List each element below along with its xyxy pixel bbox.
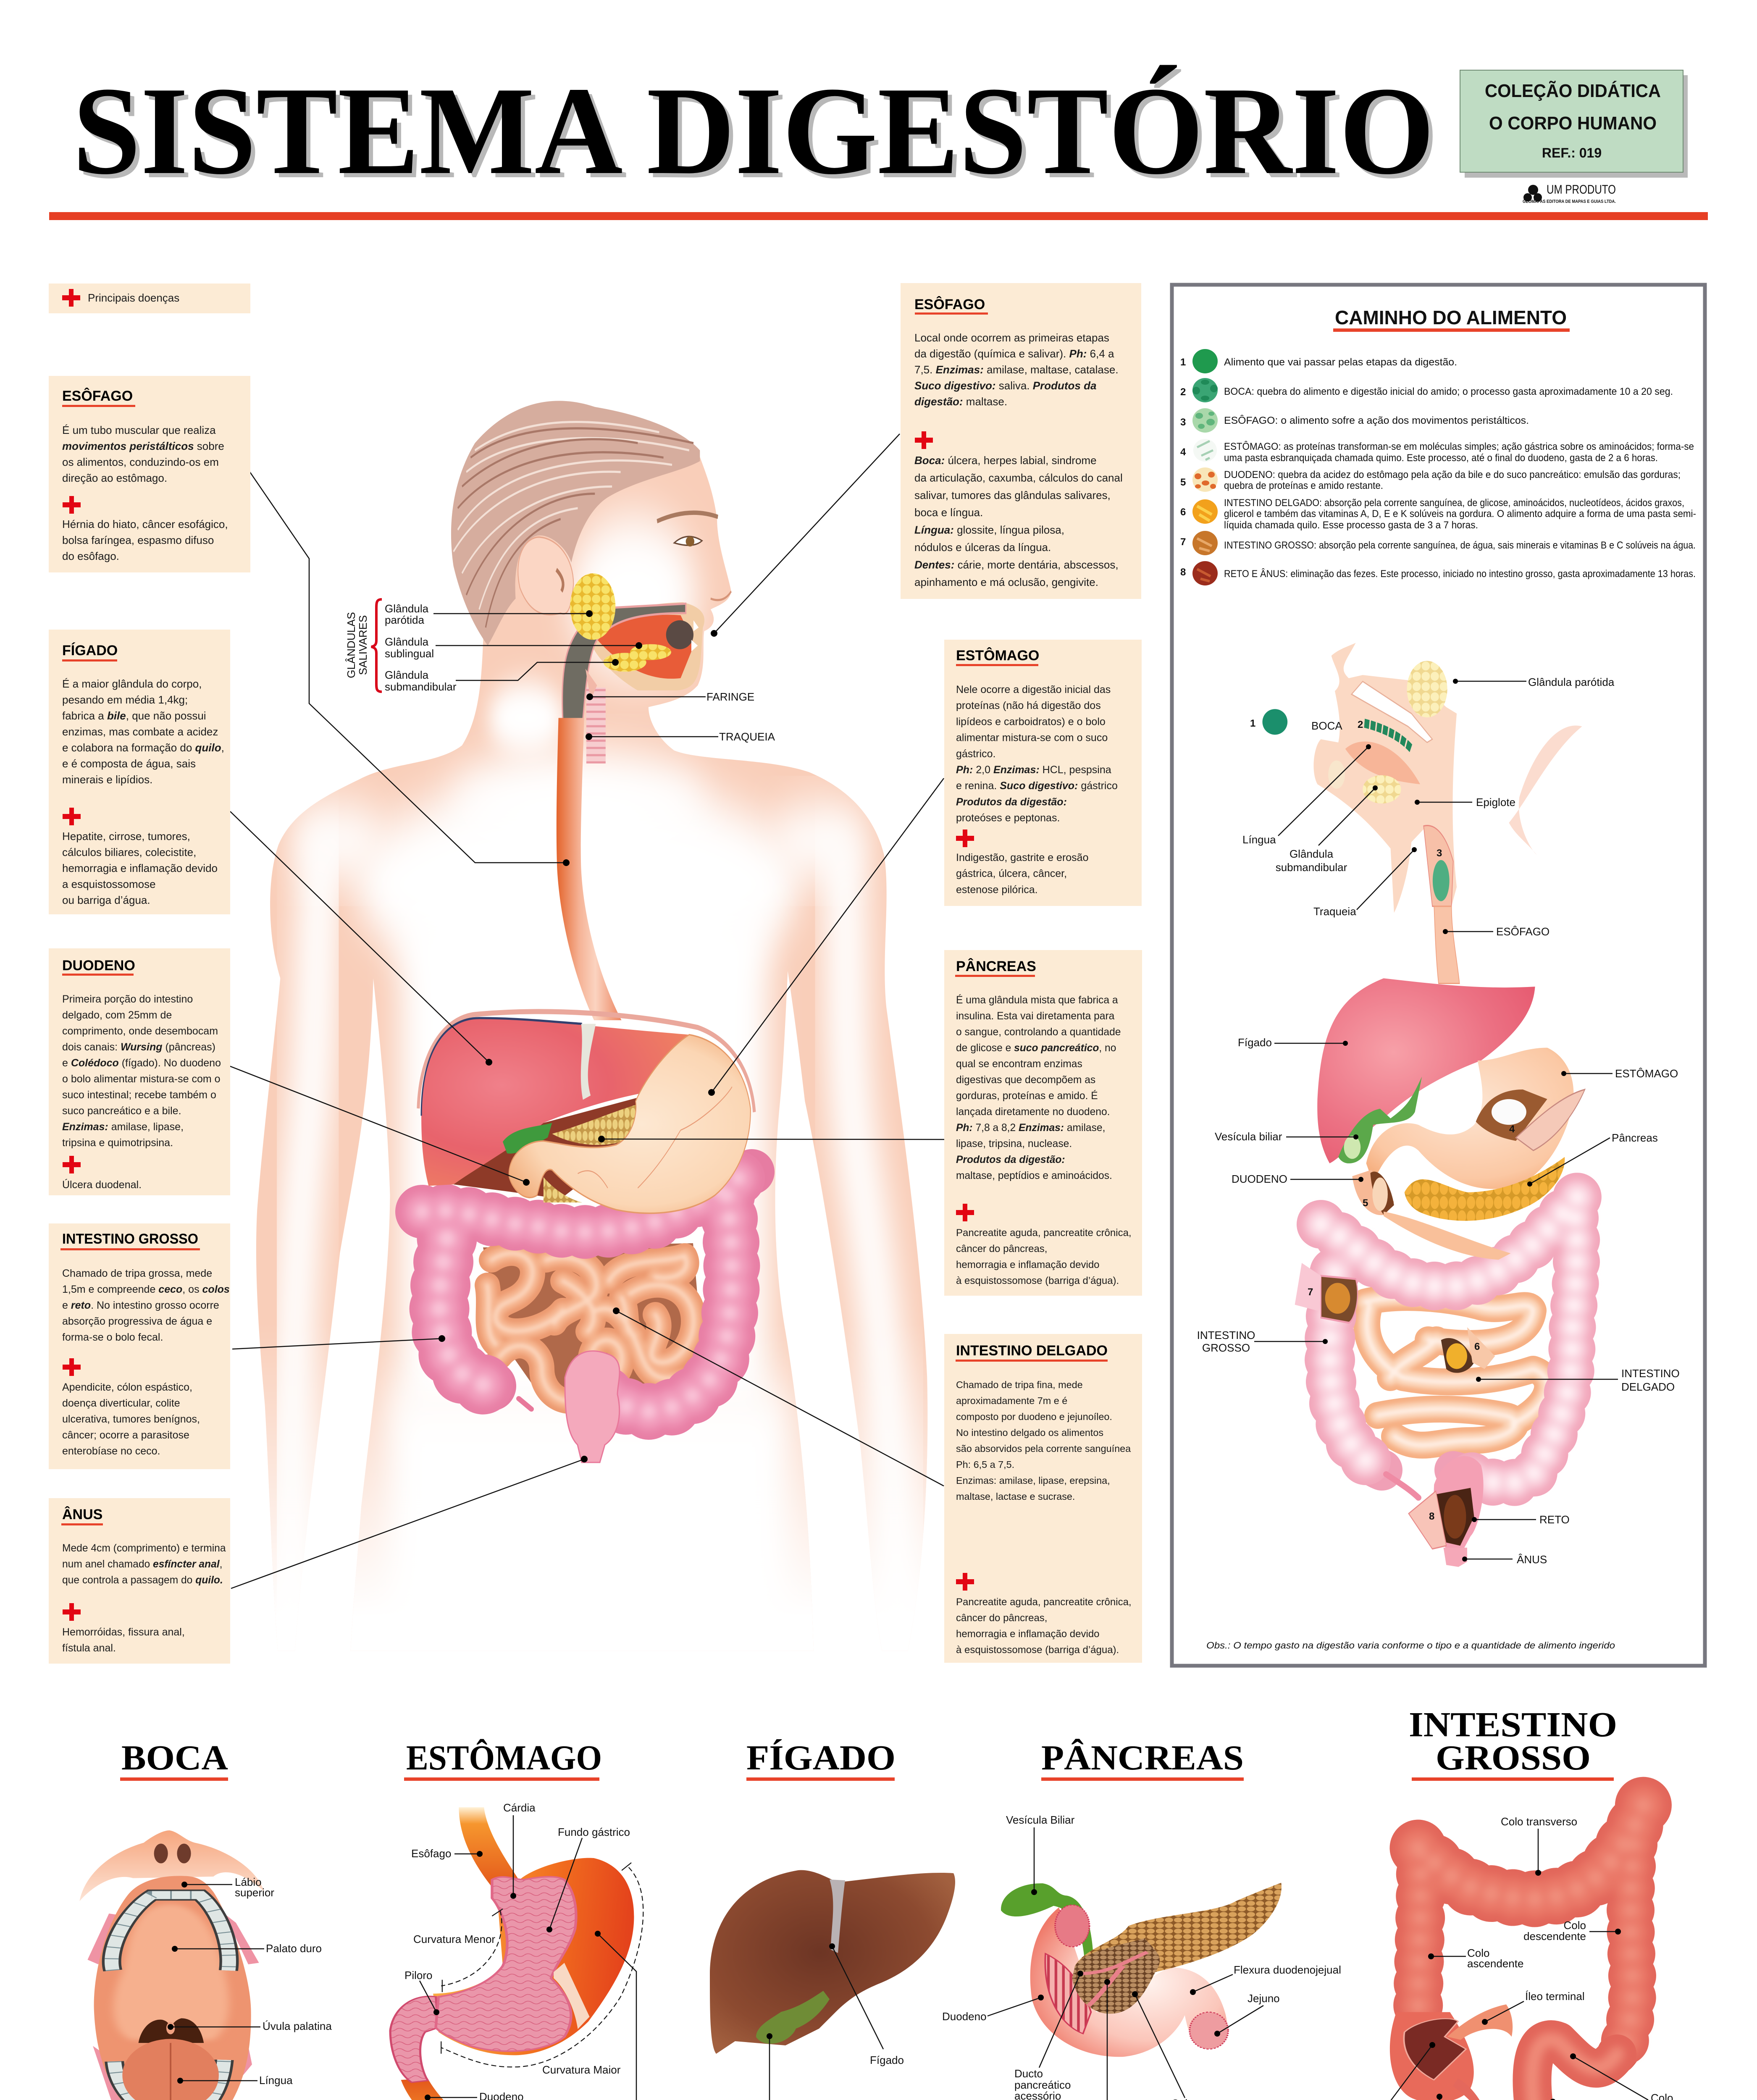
panel: intestino grosso: doença diverticular, colite bbox=[62, 1397, 180, 1409]
panel: pâncreas: digestivas que decompõem as bbox=[956, 1074, 1095, 1086]
illustration: mouth: Língua bbox=[259, 2074, 293, 2087]
large intestine bbox=[1321, 1197, 1577, 1498]
diagram labels bbox=[1197, 676, 1680, 1566]
panel: ânus: ÂNUS bbox=[62, 1507, 102, 1522]
illustration: mouth: Palato duro bbox=[266, 1942, 322, 1955]
panel: pâncreas: hemorragia e inflamação devido bbox=[956, 1259, 1100, 1270]
panel: estômago: gástrico. bbox=[956, 748, 995, 760]
panel: pâncreas: o sangue, controlando a quantidade bbox=[956, 1026, 1121, 1038]
panel: legend: Principais doenças bbox=[88, 291, 179, 304]
panel: ânus: que controla a passagem do quilo. bbox=[62, 1575, 223, 1586]
panel: esôfago right: 7,5. Enzimas: amilase, maltase, catalase. bbox=[914, 363, 1119, 376]
diagram labels: Traqueia bbox=[1313, 905, 1356, 918]
illustration: pancreas bbox=[942, 1814, 1341, 2100]
food stage list: INTESTINO DELGADO: absorção pela corrente sanguínea, de glicose, aminoácidos, nucleotídeos, ácidos graxos, bbox=[1224, 497, 1684, 509]
panel: ânus: Hemorróidas, fissura anal, bbox=[62, 1626, 185, 1638]
hair bbox=[451, 401, 700, 646]
panel: intestino grosso: enterobíase no ceco. bbox=[62, 1445, 160, 1457]
liver, stomach, pancreas bbox=[1317, 978, 1585, 1260]
salivary gland labels: Glândula bbox=[385, 669, 429, 681]
diagram labels: 2 bbox=[1358, 719, 1363, 730]
panel: esôfago left: do esôfago. bbox=[62, 550, 119, 562]
salivary gland labels bbox=[345, 599, 642, 693]
food stage list: 4 bbox=[1180, 446, 1186, 458]
diagram labels: 7 bbox=[1308, 1286, 1313, 1298]
diagram labels: INTESTINO bbox=[1197, 1329, 1255, 1341]
panel: fígado: enzimas, mas combate a acidez bbox=[62, 725, 218, 738]
diagram labels: 4 bbox=[1509, 1124, 1515, 1135]
heading: intestino grosso bbox=[1409, 1705, 1617, 1781]
panel: fígado: cálculos biliares, colecistite, bbox=[62, 846, 196, 858]
panel: esôfago left bbox=[49, 376, 250, 572]
food stage list: quebra de proteínas e amido restante. bbox=[1224, 480, 1383, 491]
panel: estômago: ESTÔMAGO bbox=[956, 647, 1039, 664]
panel: duodeno: Enzimas: amilase, lipase, bbox=[62, 1121, 184, 1133]
panel: intestino grosso: ulcerativa, tumores benígnos, bbox=[62, 1413, 200, 1425]
note: Obs.: O tempo gasto na digestão varia conforme o tipo e a quantidade de alimento ingerido bbox=[1206, 1640, 1615, 1651]
diagram labels: 8 bbox=[1429, 1511, 1434, 1522]
food stage list bbox=[1180, 349, 1696, 585]
panel: intestino grosso: e reto. No intestino grosso ocorre bbox=[62, 1299, 219, 1311]
panel: duodeno: suco intestinal; recebe também o bbox=[62, 1089, 216, 1101]
food stage list: ESTÔMAGO: as proteínas transforman-se em moléculas simples; ação gástrica sobre os aminoácidos; forma-se bbox=[1224, 441, 1694, 452]
heading: intestino grosso: INTESTINO bbox=[1409, 1705, 1617, 1744]
panel: estômago: alimentar mistura-se com o suco bbox=[956, 732, 1108, 744]
panel: intestino grosso: câncer; ocorre a parasitose bbox=[62, 1429, 189, 1441]
panel: esôfago right: apinhamento e má oclusão, gengivite. bbox=[914, 576, 1098, 588]
panel: esôfago left: direção ao estômago. bbox=[62, 472, 167, 484]
panel: esôfago left: os alimentos, conduzindo-os em bbox=[62, 456, 219, 468]
panel: intestino grosso: Chamado de tripa grossa, mede bbox=[62, 1268, 212, 1279]
illustration: liver bbox=[710, 1870, 955, 2100]
panel: esôfago right: nódulos e úlceras da língua. bbox=[914, 541, 1051, 554]
food stage list: ESÔFAGO: o alimento sofre a ação dos movimentos peristálticos. bbox=[1224, 415, 1529, 426]
liver, stomach and pancreas bbox=[418, 1012, 754, 1213]
panel: duodeno: e Colédoco (fígado). No duodeno bbox=[62, 1057, 221, 1069]
panel: esôfago left: É um tubo muscular que realiza bbox=[62, 424, 216, 436]
illustration: large intestine: Colo transverso bbox=[1501, 1815, 1577, 1828]
panel: ânus bbox=[49, 1498, 230, 1664]
illustration: large intestine: ascendente bbox=[1467, 1957, 1523, 1970]
illustration: mouth: Úvula palatina bbox=[263, 2020, 332, 2032]
panel: duodeno bbox=[49, 948, 230, 1195]
salivary gland labels: parótida bbox=[385, 614, 424, 626]
diagram labels: Vesícula biliar bbox=[1215, 1130, 1282, 1143]
head section bbox=[1262, 643, 1582, 984]
diagram labels: 1 bbox=[1250, 718, 1255, 729]
diagram labels: submandibular bbox=[1276, 861, 1347, 874]
panel: fígado: e é composta de água, sais bbox=[62, 757, 196, 770]
food stage list: 7 bbox=[1180, 536, 1186, 548]
panel: pâncreas bbox=[944, 950, 1142, 1296]
panel: estômago: Ph: 2,0 Enzimas: HCL, pespsina bbox=[956, 764, 1111, 776]
top red rule bbox=[49, 212, 1708, 220]
illustration: stomach: Curvatura Menor bbox=[413, 1933, 495, 1945]
diagram labels: Pâncreas bbox=[1612, 1131, 1658, 1144]
panel: intestino grosso: Apendicite, cólon espástico, bbox=[62, 1381, 192, 1393]
panel: intestino grosso: absorção progressiva de água e bbox=[62, 1315, 212, 1327]
panel: fígado: pesando em média 1,4kg; bbox=[62, 693, 188, 706]
food stage list: BOCA: quebra do alimento e digestão inicial do amido; o processo gasta aproximadamente 10 a 20 seg. bbox=[1224, 386, 1673, 397]
diagram labels: 3 bbox=[1437, 848, 1442, 859]
panel: fígado bbox=[49, 630, 230, 914]
publisher mark: UM PRODUTO bbox=[1547, 183, 1616, 197]
panel: intestino delgado: composto por duodeno e jejunoíleo. bbox=[956, 1411, 1112, 1422]
panel: pâncreas: insulina. Esta vai diretamenta para bbox=[956, 1011, 1115, 1022]
food stage list: 2 bbox=[1180, 386, 1186, 398]
panel: pâncreas: qual se encontram enzimas bbox=[956, 1058, 1082, 1070]
food stage list: 6 bbox=[1180, 507, 1186, 518]
pharynx and trachea labels: TRAQUEIA bbox=[719, 730, 775, 743]
panel: intestino delgado: Pancreatite aguda, pancreatite crônica, bbox=[956, 1596, 1132, 1608]
panel: intestino delgado: No intestino delgado os alimentos bbox=[956, 1427, 1103, 1438]
panel: fígado: a esquistossomose bbox=[62, 878, 156, 890]
panel: pâncreas: à esquistossomose (barriga d’água). bbox=[956, 1275, 1119, 1286]
diagram labels: Glândula bbox=[1290, 848, 1334, 860]
panel: duodeno: o bolo alimentar mistura-se com o bbox=[62, 1073, 221, 1085]
illustration: stomach bbox=[390, 1801, 651, 2100]
panel: fígado: ou barriga d’água. bbox=[62, 894, 150, 906]
cut-away windows and rectum bbox=[1295, 1263, 1495, 1567]
rectum and anus bbox=[565, 1351, 620, 1462]
title: SISTEMA DIGESTÓRIO bbox=[73, 61, 1434, 200]
collection badge: COLEÇÃO DIDÁTICA bbox=[1485, 80, 1661, 101]
illustration: large intestine: Íleo terminal bbox=[1525, 1990, 1585, 2003]
panel: intestino grosso bbox=[49, 1223, 230, 1469]
panel: esôfago right: Boca: úlcera, herpes labial, sindrome bbox=[914, 454, 1097, 467]
panel: pâncreas: lipase, tripsina, nuclease. bbox=[956, 1138, 1072, 1150]
panel: fígado: FÍGADO bbox=[62, 643, 118, 659]
food stage list: 1 bbox=[1180, 357, 1186, 368]
illustration: stomach: Curvatura Maior bbox=[542, 2063, 621, 2076]
panel: esôfago right: digestão: maltase. bbox=[914, 395, 1007, 408]
diagram labels: Língua bbox=[1242, 833, 1276, 846]
pharynx and trachea labels bbox=[586, 690, 775, 743]
salivary gland labels: GLÂNDULAS bbox=[345, 612, 357, 678]
panel: pâncreas: É uma glândula mista que fabrica a bbox=[956, 995, 1118, 1006]
food stage list: Alimento que vai passar pelas etapas da digestão. bbox=[1224, 357, 1457, 368]
diagram labels: Fígado bbox=[1238, 1036, 1272, 1049]
food stage list: INTESTINO GROSSO: absorção pela corrente sanguínea, de água, sais minerais e vitaminas B e C solúveis na água. bbox=[1224, 540, 1696, 551]
panel: esôfago left: movimentos peristálticos sobre bbox=[62, 440, 224, 452]
panel: esôfago right: Suco digestivo: saliva. Produtos da bbox=[914, 379, 1096, 392]
panel: esôfago right: Língua: glossite, língua pilosa, bbox=[914, 524, 1064, 536]
panel: ânus: Mede 4cm (comprimento) e termina bbox=[62, 1543, 226, 1554]
panel: duodeno: delgado, com 25mm de bbox=[62, 1009, 172, 1021]
panel: duodeno: Úlcera duodenal. bbox=[62, 1179, 142, 1191]
small intestine bbox=[1365, 1297, 1547, 1445]
panel: pâncreas: lançada diretamente no duodeno. bbox=[956, 1106, 1110, 1118]
panel: duodeno: tripsina e quimotripsina. bbox=[62, 1137, 173, 1149]
diagram labels: Epiglote bbox=[1476, 796, 1515, 808]
panel: estômago: gástrica, úlcera, câncer, bbox=[956, 868, 1067, 879]
body silhouette bbox=[256, 457, 927, 1651]
food stage list: glicerol e também das vitaminas A, D, E e K solúveis na gordura. O alimento adquire a forma de uma pasta semi- bbox=[1224, 508, 1696, 520]
food stage list: líquida chamada quilo. Esse processo gasta de 3 a 7 horas. bbox=[1224, 520, 1478, 531]
panel: pâncreas: Pancreatite aguda, pancreatite crônica, bbox=[956, 1227, 1132, 1239]
panel: duodeno: DUODENO bbox=[62, 958, 135, 974]
panel heading: CAMINHO DO ALIMENTO bbox=[1335, 307, 1567, 328]
illustration: pancreas: Jejuno bbox=[1247, 1992, 1280, 2005]
illustration: liver: Fígado bbox=[870, 2054, 904, 2066]
panel: esôfago right: da articulação, caxumba, cálculos do canal bbox=[914, 471, 1123, 484]
panel: esôfago right: da digestão (química e salivar). Ph: 6,4 a bbox=[914, 347, 1114, 360]
panel: intestino delgado bbox=[944, 1334, 1142, 1663]
digestive path diagram bbox=[1197, 643, 1680, 1567]
panel: esôfago right: Local onde ocorrem as primeiras etapas bbox=[914, 331, 1109, 344]
panel: intestino grosso: forma-se o bolo fecal. bbox=[62, 1331, 163, 1343]
panel: esôfago right: salivar, tumores das glândulas salivares, bbox=[914, 489, 1111, 501]
panel: intestino delgado: INTESTINO DELGADO bbox=[956, 1343, 1108, 1359]
panel: estômago: Produtos da digestão: bbox=[956, 796, 1067, 808]
food stage list: 3 bbox=[1180, 417, 1186, 428]
diagram labels: ESTÔMAGO bbox=[1615, 1067, 1678, 1080]
large intestine bbox=[422, 1172, 752, 1411]
illustration: large intestine: descendente bbox=[1523, 1930, 1586, 1942]
panel: intestino delgado: são absorvidos pela corrente sanguínea bbox=[956, 1443, 1131, 1454]
panel: intestino delgado: maltase, lactase e sucrase. bbox=[956, 1491, 1075, 1502]
panel: ânus: num anel chamado esfíncter anal, bbox=[62, 1559, 222, 1570]
panel: fígado: fabrica a bile, que não possui bbox=[62, 709, 206, 722]
diagram labels: RETO bbox=[1539, 1513, 1570, 1526]
panel: esôfago right: ESÔFAGO bbox=[914, 296, 985, 312]
illustration: pancreas: Flexura duodenojejual bbox=[1234, 1964, 1341, 1976]
salivary gland labels: SALIVARES bbox=[357, 615, 369, 675]
panel: intestino delgado: à esquistossomose (barriga d’água). bbox=[956, 1644, 1119, 1656]
panel: esôfago left: ESÔFAGO bbox=[62, 388, 133, 404]
heading: boca: BOCA bbox=[121, 1738, 228, 1777]
diagram labels: BOCA bbox=[1311, 719, 1342, 732]
salivary gland labels: Glândula bbox=[385, 635, 429, 648]
heading: pâncreas: PÂNCREAS bbox=[1041, 1738, 1244, 1777]
panel: esôfago right bbox=[901, 283, 1141, 599]
illustration: large intestine: Colo bbox=[1564, 1919, 1586, 1932]
panel: intestino delgado: hemorragia e inflamação devido bbox=[956, 1628, 1100, 1640]
publisher mark bbox=[1523, 183, 1616, 204]
pharynx and trachea labels: FARINGE bbox=[706, 690, 754, 703]
panel: legend bbox=[49, 284, 250, 313]
title: SISTEMA DIGESTÓRIO bbox=[77, 65, 1439, 205]
collection badge bbox=[1460, 70, 1688, 178]
panel: pâncreas: de glicose e suco pancreático, no bbox=[956, 1042, 1116, 1054]
panel: esôfago left: Hérnia do hiato, câncer esofágico, bbox=[62, 518, 228, 530]
illustration: pancreas: pancreático bbox=[1014, 2079, 1071, 2091]
panel: estômago: Nele ocorre a digestão inicial das bbox=[956, 684, 1111, 696]
panel: intestino delgado: Chamado de tripa fina, mede bbox=[956, 1379, 1083, 1390]
panel: caminho do alimento bbox=[1172, 285, 1705, 1666]
heading: intestino grosso: GROSSO bbox=[1436, 1738, 1591, 1777]
panel: fígado: É a maior glândula do corpo, bbox=[62, 677, 202, 690]
panel: estômago: proteóses e peptonas. bbox=[956, 812, 1060, 824]
panel: pâncreas: Ph: 7,8 a 8,2 Enzimas: amilase, bbox=[956, 1122, 1105, 1134]
panel: fígado: hemorragia e inflamação devido bbox=[62, 862, 218, 874]
panel: fígado: e colabora na formação do quilo, bbox=[62, 741, 224, 754]
diagram labels: 5 bbox=[1363, 1197, 1368, 1209]
food stage list: uma pasta esbranquiçada chamada quimo. Este processo, até o final do duodeno, gasta de 2 a 6 horas. bbox=[1224, 452, 1658, 464]
publisher mark: GEOMAPAS EDITORA DE MAPAS E GUIAS LTDA. bbox=[1523, 199, 1616, 204]
panel: pâncreas: maltase, peptídios e aminoácidos. bbox=[956, 1170, 1112, 1181]
panel: pâncreas: gorduras, proteínas e amido. É bbox=[956, 1090, 1098, 1102]
illustration: stomach: Esôfago bbox=[411, 1847, 451, 1860]
panel: intestino grosso: INTESTINO GROSSO bbox=[62, 1231, 198, 1247]
diagram labels: Glândula parótida bbox=[1528, 676, 1615, 688]
heading: fígado: FÍGADO bbox=[746, 1738, 896, 1777]
food stage list: DUODENO: quebra da acidez do estômago pela ação da bile e do suco pancreático: emulsão das gorduras; bbox=[1224, 469, 1681, 480]
panel: pâncreas: PÂNCREAS bbox=[956, 958, 1036, 974]
diagram labels: DELGADO bbox=[1621, 1381, 1675, 1393]
panel: intestino delgado: aproximadamente 7m e é bbox=[956, 1395, 1067, 1406]
heading: estômago: ESTÔMAGO bbox=[406, 1738, 602, 1777]
illustration: stomach: Piloro bbox=[404, 1969, 432, 1982]
oral cavity section bbox=[562, 573, 704, 764]
panel: estômago: proteínas (não há digestão dos bbox=[956, 700, 1101, 711]
panel: duodeno: dois canais: Wursing (pâncreas) bbox=[62, 1041, 215, 1053]
panel: duodeno: suco pancreático e a bile. bbox=[62, 1105, 181, 1117]
illustration: stomach: Fundo gástrico bbox=[558, 1826, 630, 1838]
diagram labels: ESÔFAGO bbox=[1496, 925, 1550, 938]
panel: ânus: fístula anal. bbox=[62, 1642, 116, 1654]
salivary gland labels: submandibular bbox=[385, 680, 457, 693]
illustration: mouth: Lábio bbox=[235, 1876, 262, 1888]
diagram labels: DUODENO bbox=[1232, 1173, 1287, 1185]
panel: estômago: lipídeos e carboidratos) e o bolo bbox=[956, 716, 1106, 727]
salivary gland labels: sublingual bbox=[385, 647, 434, 660]
panel: estômago: e renina. Suco digestivo: gástrico bbox=[956, 780, 1118, 792]
panel: intestino delgado: Ph: 6,5 a 7,5. bbox=[956, 1459, 1014, 1470]
panel: intestino delgado: câncer do pâncreas, bbox=[956, 1612, 1047, 1624]
diagram labels: ÂNUS bbox=[1517, 1553, 1547, 1566]
esophagus bbox=[557, 718, 622, 1020]
food stage list: 5 bbox=[1180, 477, 1186, 488]
panel: duodeno: Primeira porção do intestino bbox=[62, 993, 193, 1005]
illustration: mouth: superior bbox=[235, 1886, 274, 1899]
food stage list: 8 bbox=[1180, 567, 1186, 578]
ear and face features bbox=[518, 513, 731, 615]
panel: fígado: Hepatite, cirrose, tumores, bbox=[62, 830, 190, 843]
diagram labels: 6 bbox=[1474, 1341, 1480, 1352]
human body illustration bbox=[256, 401, 927, 1651]
diagram labels: GROSSO bbox=[1202, 1341, 1250, 1354]
panel: esôfago right: Dentes: cárie, morte dentária, abscessos, bbox=[914, 558, 1119, 571]
small intestine bbox=[483, 1243, 701, 1407]
food stage list: RETO E ÂNUS: eliminação das fezes. Este processo, iniciado no intestino grosso, gasta aproximadamente 13 horas. bbox=[1224, 568, 1696, 580]
leader lines: main figure bbox=[229, 434, 944, 1588]
panel: estômago bbox=[944, 640, 1142, 906]
panel: esôfago left: bolsa faríngea, espasmo difuso bbox=[62, 534, 214, 546]
illustration: pancreas: Vesícula Biliar bbox=[1006, 1814, 1075, 1826]
illustration: pancreas: Ducto bbox=[1014, 2067, 1043, 2080]
panel: intestino delgado: Enzimas: amilase, lipase, erepsina, bbox=[956, 1475, 1110, 1486]
illustration: large intestine: Colo bbox=[1467, 1947, 1489, 1959]
panel: duodeno: comprimento, onde desembocam bbox=[62, 1025, 218, 1037]
diagram labels: INTESTINO bbox=[1621, 1367, 1680, 1380]
panel: esôfago right: boca e língua. bbox=[914, 506, 983, 519]
collection badge: REF.: 019 bbox=[1542, 145, 1602, 160]
illustration: mouth bbox=[79, 1830, 332, 2100]
panel: estômago: Indigestão, gastrite e erosão bbox=[956, 852, 1088, 864]
collection badge: O CORPO HUMANO bbox=[1489, 113, 1657, 134]
salivary gland labels: Glândula bbox=[385, 602, 429, 615]
panel: intestino grosso: 1,5m e compreende ceco, os colos bbox=[62, 1284, 230, 1295]
panel: pâncreas: câncer do pâncreas, bbox=[956, 1243, 1047, 1255]
illustration: stomach: Cárdia bbox=[503, 1801, 536, 1814]
illustration: pancreas: Duodeno bbox=[942, 2010, 987, 2023]
panel: pâncreas: Produtos da digestão: bbox=[956, 1154, 1065, 1166]
illustration: large intestine bbox=[1363, 1802, 1694, 2100]
panel: estômago: estenose pilórica. bbox=[956, 884, 1038, 895]
panel: fígado: minerais e lipídios. bbox=[62, 773, 152, 786]
